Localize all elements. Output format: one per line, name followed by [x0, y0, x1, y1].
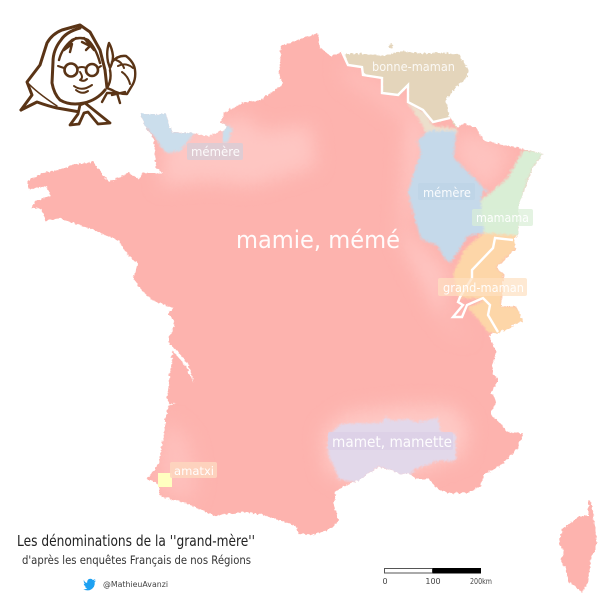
region: blue mémère Lorraine — [407, 130, 488, 262]
region: amatxi yellow square — [158, 473, 172, 487]
nose and mouth — [74, 72, 92, 93]
region: orange grand-maman — [452, 232, 525, 335]
icon: twitter bird — [83, 579, 96, 590]
scarf knot and tails — [70, 103, 110, 125]
scarf lower edge — [21, 102, 80, 112]
label: grand-maman: grand-maman — [443, 281, 524, 295]
label: mamama: mamama — [476, 211, 529, 225]
subtitle: d'après les enquêtes Français de nos Régions — [22, 553, 251, 567]
hood inner edge — [52, 28, 105, 104]
label: mémère Normandy: mémère — [191, 145, 240, 159]
twitter handle: @MathieuAvanzi — [103, 580, 168, 589]
region: beige bonne-maman beyond the border — [344, 50, 467, 130]
headscarf outer outline — [21, 25, 107, 110]
border: white line along the Belgian frontier — [342, 52, 450, 122]
label: mamie, mémé: mamie, mémé — [236, 226, 400, 254]
scale bar: 200km — [470, 577, 492, 586]
label: bonne-maman: bonne-maman — [372, 60, 455, 74]
title: Les dénominations de la ''grand-mère'' — [17, 532, 255, 550]
scale bar: 0 — [382, 577, 388, 586]
scale bar: 100 — [425, 577, 441, 586]
region: blue mémère Normandy — [140, 113, 196, 154]
region: beige bonne-maman inside France — [405, 100, 456, 134]
border: white line along the Swiss frontier — [453, 238, 513, 332]
pointing hand — [107, 43, 135, 94]
label: mamet, mamette: mamet, mamette — [332, 433, 452, 451]
hair and forehead — [59, 38, 100, 63]
curled fingers — [116, 60, 133, 84]
region: purple mamet, mamette — [327, 416, 455, 482]
label: mémère Lorraine: mémère — [423, 186, 471, 200]
map: France dialect regions — [28, 33, 544, 536]
island: Corsica — [558, 500, 596, 592]
glasses — [64, 64, 78, 76]
sleeve — [102, 92, 125, 103]
scale bar — [382, 568, 492, 586]
region: mainland France base — [28, 33, 544, 536]
label: amatxi: amatxi — [174, 464, 214, 478]
region: green mamama — [480, 150, 545, 235]
scarf side fold — [27, 82, 57, 106]
icon: grandmother with headscarf — [21, 25, 135, 125]
